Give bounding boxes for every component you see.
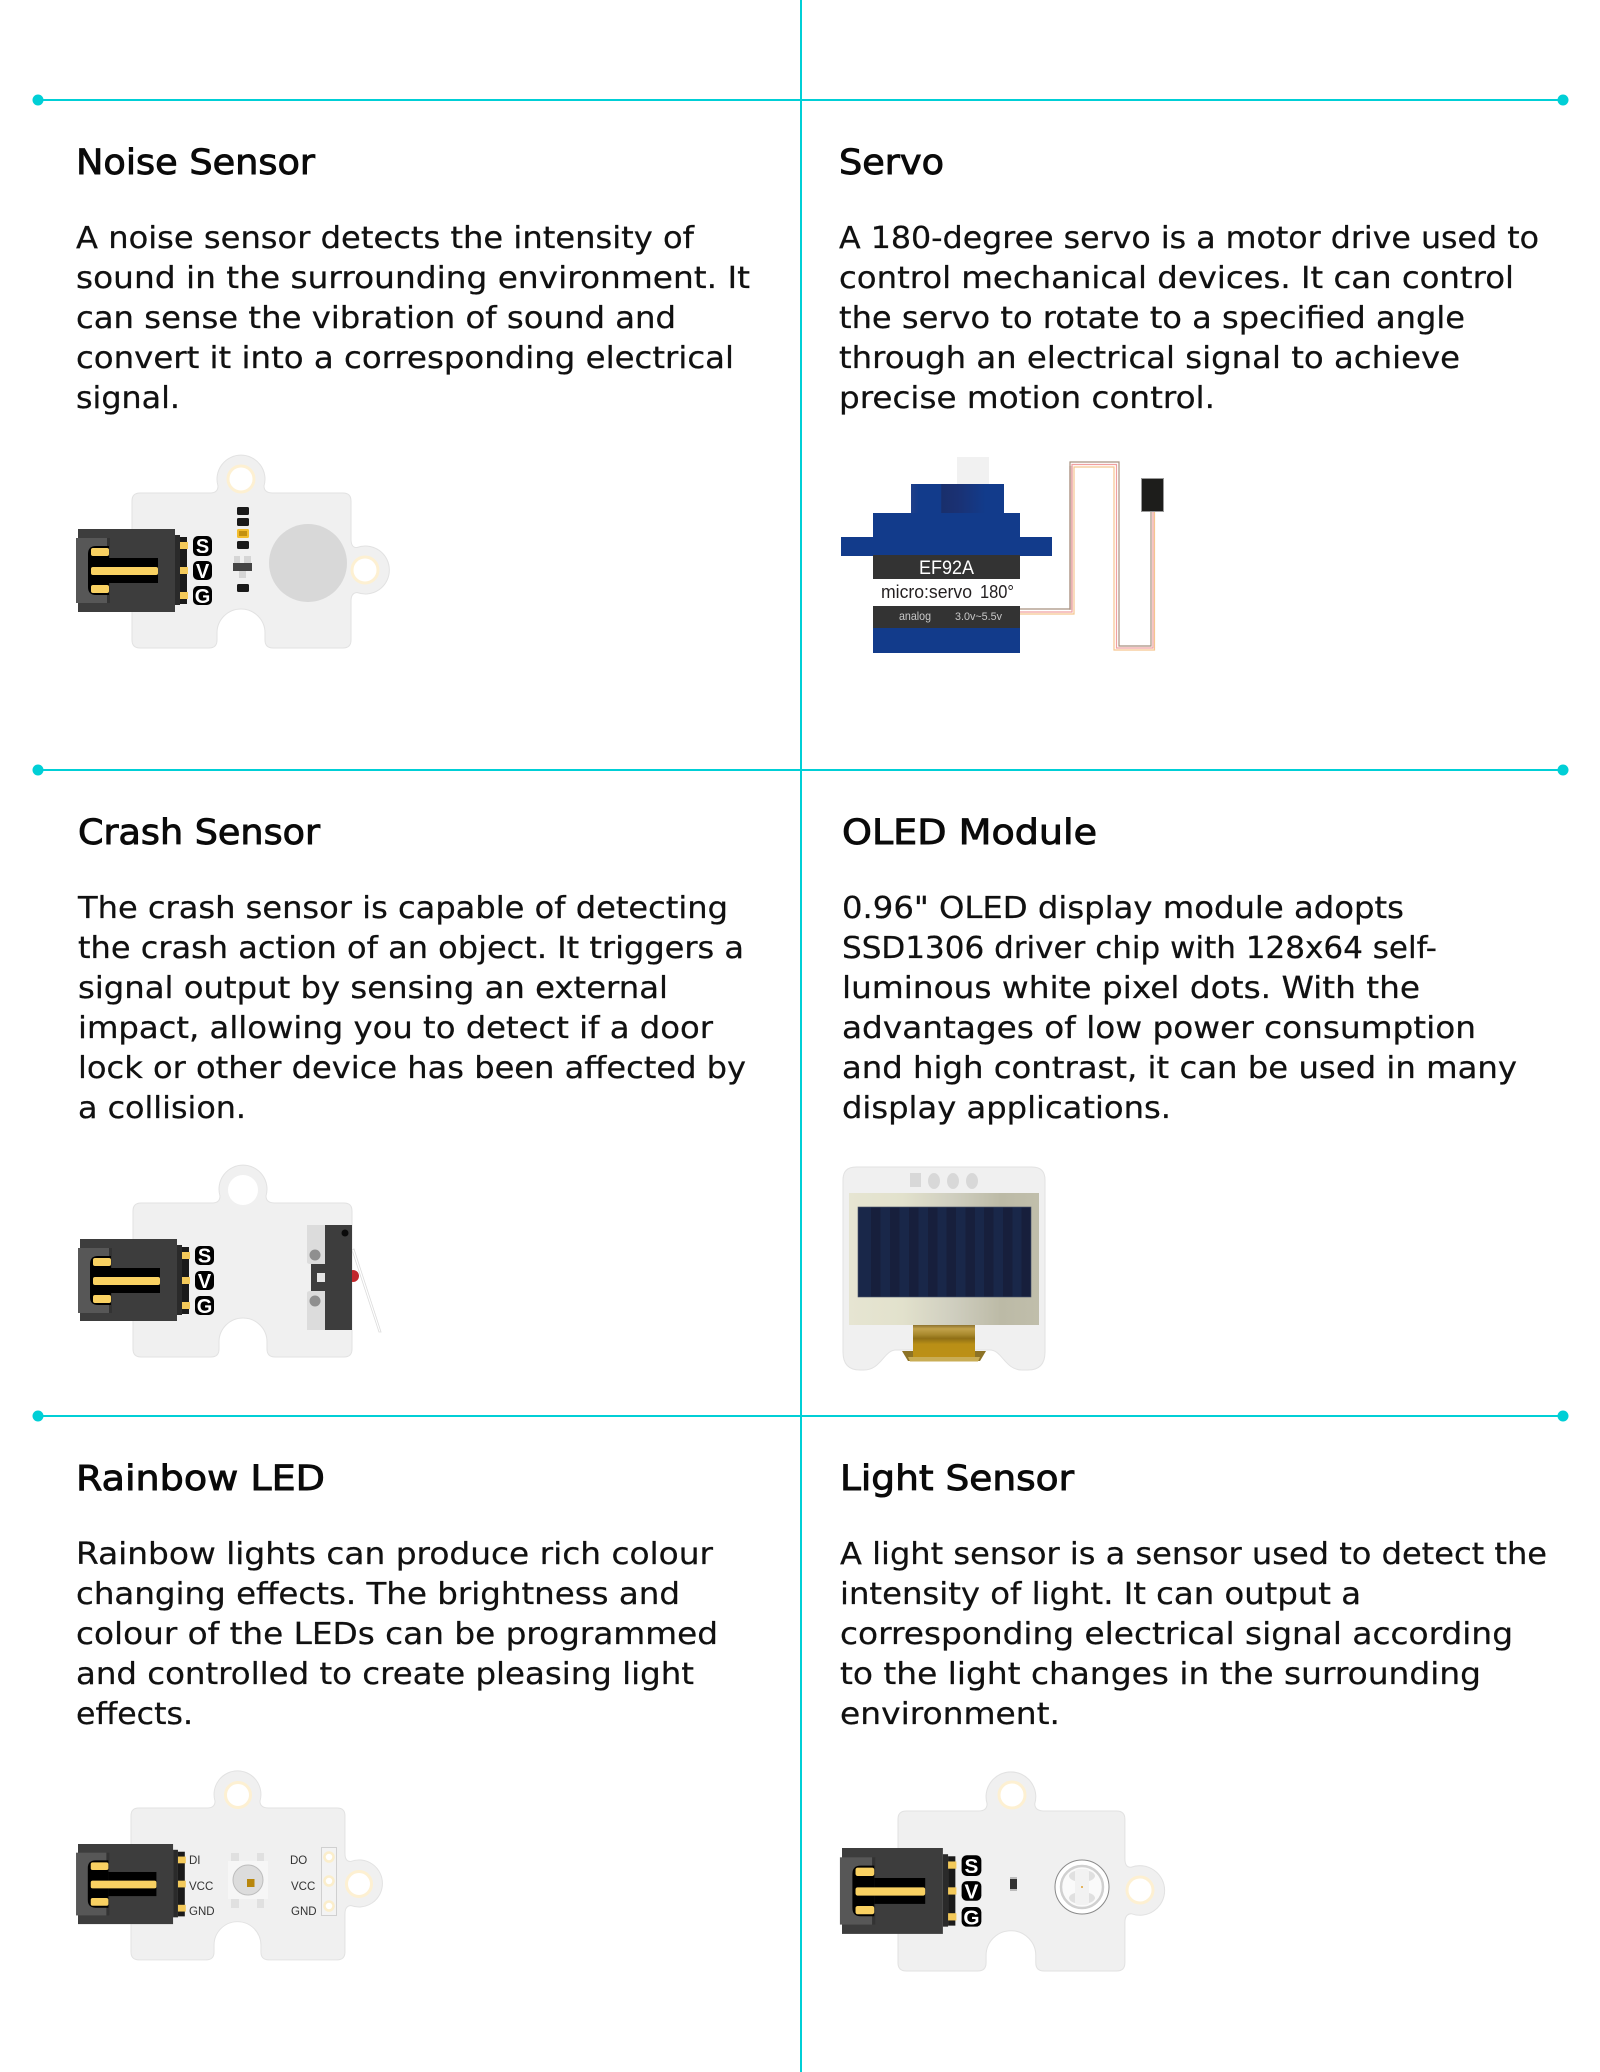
pin labels: VCC [291, 1881, 315, 1893]
pin labels: GND [189, 1906, 215, 1918]
heading: Servo: Servo [839, 143, 944, 183]
pin holes [910, 1173, 978, 1189]
light sensor lens [1055, 1860, 1109, 1914]
text block: OLED Module description: display applications. [842, 1091, 1171, 1126]
mounting holes [999, 1782, 1153, 1903]
text block: Crash Sensor description: impact, allowing you to detect if a door [78, 1011, 714, 1046]
SMD components [233, 507, 252, 592]
heading: Rainbow LED: Rainbow LED [76, 1459, 325, 1499]
text block: Light Sensor description: A light sensor is a sensor used to detect the [840, 1537, 1547, 1572]
text block: Rainbow LED description: changing effects. The brightness and [76, 1577, 680, 1612]
heading: OLED Module: OLED Module [842, 813, 1097, 853]
text block: Crash Sensor description: a collision. [78, 1091, 246, 1126]
ribbon cable [902, 1325, 986, 1362]
pin labels: GND [291, 1906, 317, 1918]
pin labels: DI [189, 1855, 200, 1867]
text block: Crash Sensor description: the crash action of an object. It triggers a [78, 931, 744, 966]
display glass [849, 1193, 1039, 1325]
servo labels: micro:servo [881, 582, 972, 602]
text block: Noise Sensor description [76, 221, 750, 416]
pin labels: VCC [189, 1881, 213, 1893]
illustration: OLED module [843, 1167, 1045, 1370]
text block: OLED Module description: 0.96" OLED display module adopts [842, 891, 1404, 926]
JST connector with S V G labels: G [197, 1296, 212, 1318]
horizontal rule 2 with end dots [32, 764, 1568, 776]
JST connector with S V G labels: S [965, 1855, 979, 1878]
illustration: light sensor module [840, 1772, 1165, 1971]
pin labels: DO [290, 1855, 307, 1867]
text block: Noise Sensor description: A noise sensor detects the intensity of [76, 221, 696, 256]
heading: Crash Sensor: Crash Sensor [78, 813, 321, 853]
panel: Rainbow LED [76, 1459, 718, 1960]
servo labels [881, 558, 1014, 623]
panel: OLED Module [842, 813, 1517, 1370]
text block: OLED Module description [842, 891, 1517, 1126]
JST connector with S V G labels: G [963, 1907, 980, 1930]
JST connector with S V G labels [78, 1239, 214, 1321]
JST connector with S V G labels: V [198, 1271, 212, 1293]
panel: Light Sensor [840, 1459, 1547, 1971]
text block: Light Sensor description: to the light changes in the surrounding [840, 1657, 1481, 1692]
circuit board [132, 455, 389, 648]
text block: Crash Sensor description: lock or other device has been affected by [78, 1051, 746, 1086]
circuit board [898, 1772, 1165, 1971]
text block: Noise Sensor description: convert it into a corresponding electrical [76, 341, 734, 376]
servo labels: 180° [980, 582, 1014, 602]
display screen [858, 1207, 1031, 1297]
horizontal rule 1 with end dots [32, 94, 1568, 106]
text block: Servo description: the servo to rotate to a specified angle [839, 301, 1465, 336]
panel: Noise Sensor [76, 143, 750, 648]
servo labels: 3.0v~5.5v [955, 611, 1002, 623]
text block: Light Sensor description: environment. [840, 1697, 1060, 1732]
text block: OLED Module description: and high contrast, it can be used in many [842, 1051, 1517, 1086]
text block: Servo description: A 180-degree servo is a motor drive used to [839, 221, 1539, 256]
text block: Noise Sensor description: sound in the surrounding environment. It [76, 261, 750, 296]
micro switch [307, 1225, 381, 1332]
circuit board [133, 1165, 352, 1357]
illustration: noise sensor module [76, 455, 389, 648]
panel: Servo [839, 143, 1539, 653]
servo plug [1142, 478, 1164, 512]
pin labels [189, 1855, 317, 1918]
heading: Light Sensor: Light Sensor [840, 1459, 1075, 1499]
text block: Noise Sensor description: signal. [76, 381, 180, 416]
text block: Servo description: through an electrical signal to achieve [839, 341, 1460, 376]
servo shaft [957, 457, 989, 484]
JST connector with S V G labels [840, 1848, 981, 1934]
servo wires [1020, 462, 1154, 650]
JST connector with S V G labels: V [196, 561, 210, 583]
microphone disc [269, 524, 347, 602]
text block: Servo description [839, 221, 1539, 416]
text block: Crash Sensor description: signal output by sensing an external [78, 971, 668, 1006]
vertical divider [800, 0, 802, 2072]
illustration: crash sensor module [78, 1165, 381, 1357]
panel: Crash Sensor [77, 813, 746, 1357]
text block: Noise Sensor description: can sense the vibration of sound and [76, 301, 676, 336]
JST connector with S V G labels: V [965, 1881, 979, 1904]
text block: OLED Module description: advantages of low power consumption [842, 1011, 1476, 1046]
pin header [322, 1848, 336, 1916]
JST connector with S V G labels: S [196, 536, 209, 558]
JST connector with S V G labels: G [195, 586, 210, 608]
text block: Light Sensor description [840, 1537, 1547, 1732]
text block: Light Sensor description: corresponding electrical signal according [840, 1617, 1513, 1652]
circuit board [843, 1167, 1045, 1370]
text block: Crash Sensor description: The crash sensor is capable of detecting [77, 891, 728, 926]
servo labels: analog [899, 609, 931, 623]
servo labels: EF92A [919, 558, 974, 579]
text block: Light Sensor description: intensity of light. It can output a [840, 1577, 1361, 1612]
illustration: micro servo [841, 457, 1164, 653]
SMD resistor [1010, 1877, 1017, 1891]
JST connector with S V G labels [76, 529, 212, 612]
mounting holes [226, 1782, 372, 1896]
horizontal rule 3 with end dots [32, 1410, 1568, 1422]
text block: Crash Sensor description [77, 891, 746, 1126]
JST connector [76, 1844, 186, 1924]
servo body [841, 484, 1052, 653]
RGB LED [228, 1853, 268, 1908]
mounting hole [228, 1175, 258, 1205]
text block: Rainbow LED description: and controlled to create pleasing light [76, 1657, 694, 1692]
text block: Rainbow LED description: Rainbow lights can produce rich colour [76, 1537, 714, 1572]
text block: OLED Module description: luminous white pixel dots. With the [842, 971, 1420, 1006]
illustration: rainbow LED module [76, 1771, 382, 1960]
text block: Servo description: precise motion control. [839, 381, 1215, 416]
JST connector with S V G labels: S [198, 1246, 211, 1268]
text block: Rainbow LED description [76, 1537, 718, 1732]
mounting holes [228, 466, 378, 583]
text block: Rainbow LED description: effects. [76, 1697, 193, 1732]
text block: Servo description: control mechanical devices. It can control [839, 261, 1514, 296]
heading: Noise Sensor: Noise Sensor [76, 143, 316, 183]
text block: OLED Module description: SSD1306 driver chip with 128x64 self- [842, 931, 1437, 966]
text block: Rainbow LED description: colour of the LEDs can be programmed [76, 1617, 718, 1652]
circuit board [131, 1771, 382, 1960]
